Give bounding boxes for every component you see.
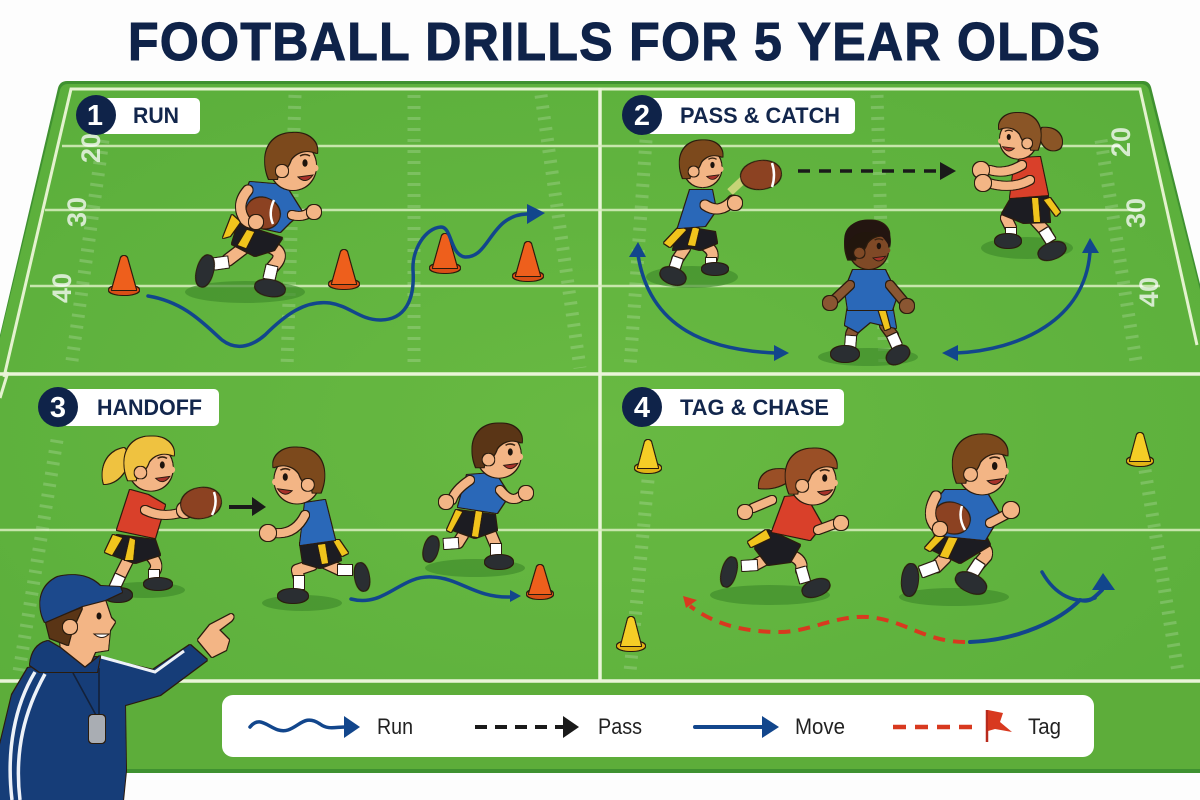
player: boy running with ball [185, 133, 321, 303]
legend: tag [893, 710, 1061, 742]
legend: pass [475, 714, 642, 739]
heading: handoff: HANDOFF [97, 395, 202, 420]
panel 3: handoff [38, 387, 553, 611]
arrow: dashed pass [798, 162, 956, 180]
coach jacket stripes [10, 672, 45, 800]
icon: orange cone 4 [513, 242, 543, 281]
arrow: left curved move [629, 242, 789, 361]
football field background: 30 [62, 197, 92, 227]
coach neck and face [60, 600, 115, 668]
player: boy throwing ball [646, 140, 783, 288]
title: FOOTBALL DRILLS FOR 5 YEAR OLDS [128, 12, 1100, 72]
player: girl handing off ball [103, 436, 223, 602]
arrow: blue move curve [970, 572, 1115, 642]
arrow: handoff [229, 497, 266, 516]
icon: yellow cone 3 [617, 617, 645, 651]
legend: run: Run [377, 714, 413, 739]
icon: orange cone 3 [430, 234, 460, 273]
icon: orange cone 2 [329, 250, 359, 289]
arrow: wavy run to cone [351, 577, 521, 602]
legend: move: Move [795, 714, 845, 739]
icon: yellow cone 2 [1127, 433, 1153, 466]
player: boy receiving handoff [260, 448, 371, 611]
panel 1: run [76, 95, 545, 346]
heading: tag and chase: TAG & CHASE [680, 395, 829, 420]
player: girl chasing [710, 449, 848, 605]
legend: run [250, 714, 413, 739]
heading: pass and catch: PASS & CATCH [680, 103, 840, 128]
football field background: 20 [1106, 127, 1136, 157]
icon: yellow cone 1 [635, 440, 661, 473]
heading: tag and chase [622, 387, 844, 427]
heading: run: 1 [87, 100, 103, 132]
heading: run [76, 95, 200, 135]
player: boy waiting [818, 220, 918, 368]
football field background: 40 [1134, 277, 1164, 307]
coach hair [46, 608, 82, 645]
arrow: weaving run path [148, 204, 545, 346]
heading: handoff [38, 387, 219, 427]
legend: tag: Tag [1028, 714, 1061, 739]
player: boy running away [421, 423, 533, 577]
arrow: red dashed tag path [683, 596, 965, 642]
coach body and arm [0, 645, 207, 800]
legend [222, 695, 1094, 757]
football field background: 30 [1121, 198, 1151, 228]
icon: orange cone [527, 565, 553, 599]
legend: move [695, 714, 845, 739]
football field background: 20 [76, 133, 106, 163]
arrow: right curved move [942, 238, 1099, 361]
coach hood [30, 641, 100, 672]
player: boy running with ball [899, 434, 1019, 606]
coach pointing [0, 575, 234, 800]
heading: tag and chase: 4 [634, 392, 650, 424]
heading: run: RUN [133, 103, 179, 128]
coach pointing hand [198, 614, 234, 657]
heading: pass and catch [622, 95, 855, 135]
legend: pass: Pass [598, 714, 642, 739]
heading: handoff: 3 [50, 392, 66, 424]
coach whistle lanyard [73, 668, 99, 717]
icon: orange cone 1 [109, 256, 139, 295]
coach cap [40, 575, 122, 622]
heading: pass and catch: 2 [634, 100, 650, 132]
player: girl catching [973, 113, 1073, 263]
football field background: 40 [47, 273, 77, 303]
panel 2: pass and catch [622, 95, 1099, 368]
panel 4: tag and chase [617, 387, 1153, 651]
coach whistle [89, 715, 105, 743]
